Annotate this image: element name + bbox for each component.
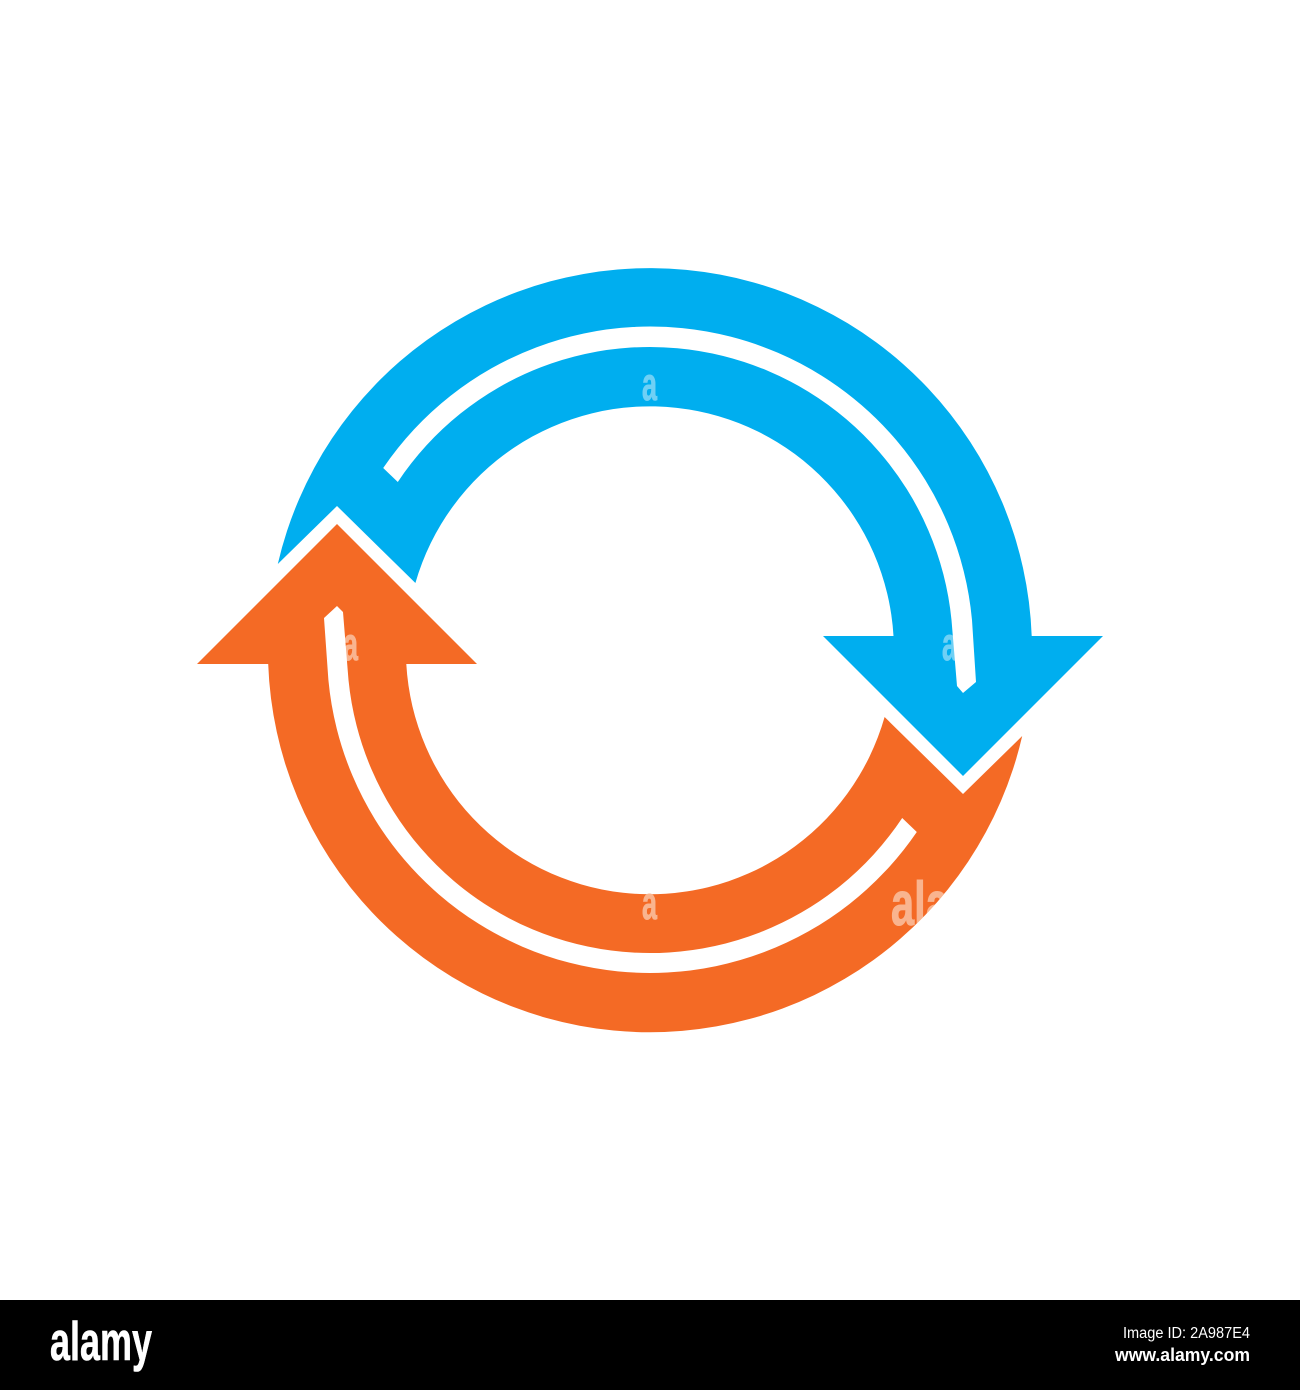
footer bar — [0, 1300, 1300, 1390]
footer logo: alamy — [50, 1310, 152, 1372]
image id: Image ID: 2A987E4 — [1123, 1325, 1250, 1342]
watermark letter: right: a — [942, 618, 957, 670]
website address: www.alamy.com — [1114, 1344, 1250, 1365]
blue circular arrow — [278, 268, 1103, 776]
watermark letter: top: a — [642, 358, 657, 410]
blue arrow inner slit — [383, 327, 976, 693]
watermark word clipped to arrow: alamy — [891, 870, 1009, 939]
footer background — [0, 1300, 1300, 1390]
orange arrow body — [197, 524, 1022, 1032]
blue arrow body — [278, 268, 1103, 776]
watermark letter: left: a — [343, 618, 358, 670]
orange circular arrow — [197, 524, 1022, 1032]
orange arrow inner slit — [324, 606, 917, 973]
watermark letter: bottom: a — [642, 877, 657, 929]
